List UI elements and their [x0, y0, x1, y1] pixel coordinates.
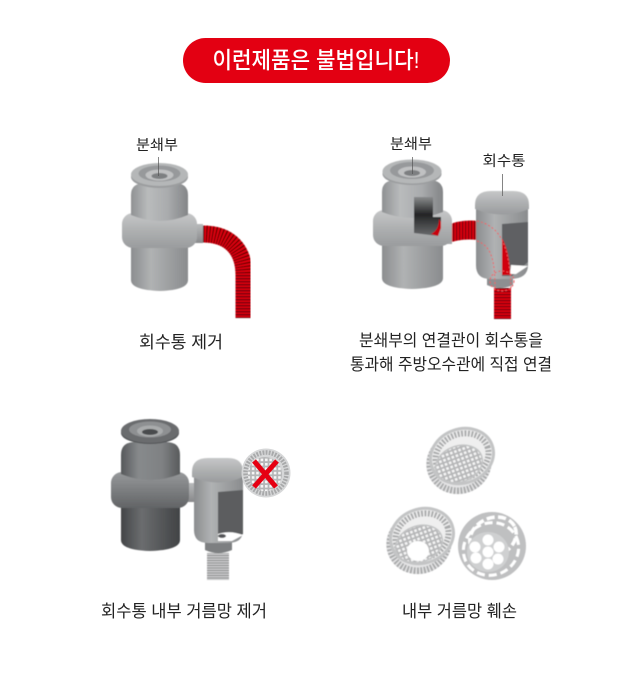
- panel: collection bin removed: [122, 137, 244, 352]
- illustration: grinder with direct red hose: [122, 163, 244, 318]
- caption: 통과해 주방오수관에 직접 연결: [350, 355, 552, 374]
- label: collection bin: 회수통: [482, 153, 526, 170]
- label: grinder: 분쇄부: [136, 137, 178, 154]
- label: grinder: [390, 136, 432, 174]
- caption: 회수통 내부 거름망 제거: [101, 602, 267, 621]
- caption: 분쇄부의 연결관이 회수통을: [359, 331, 543, 350]
- label: grinder: 분쇄부: [390, 136, 432, 153]
- panel: pipe through bin: [350, 136, 552, 374]
- icon: strainer with seven holes: [455, 510, 527, 584]
- icon: intact strainer: [417, 420, 501, 503]
- caption: 내부 거름망 훼손: [402, 602, 517, 621]
- panel: damaged strainers: [377, 420, 527, 621]
- caption: [350, 331, 552, 374]
- label: grinder: [136, 137, 178, 176]
- illustration: grinder and bin with hose through: [373, 160, 529, 319]
- title pill: 이런제품은 불법입니다!: [212, 47, 420, 73]
- icon: strainer with red X: [242, 448, 290, 498]
- label: collection bin: [482, 153, 526, 196]
- icon: strainer with centre hole: [377, 500, 461, 583]
- caption: 회수통 제거: [139, 333, 223, 352]
- title pill: [183, 38, 450, 83]
- illustration: dark grinder with bin and steel hose: [111, 419, 243, 580]
- panel: inner strainer removed: [101, 419, 290, 621]
